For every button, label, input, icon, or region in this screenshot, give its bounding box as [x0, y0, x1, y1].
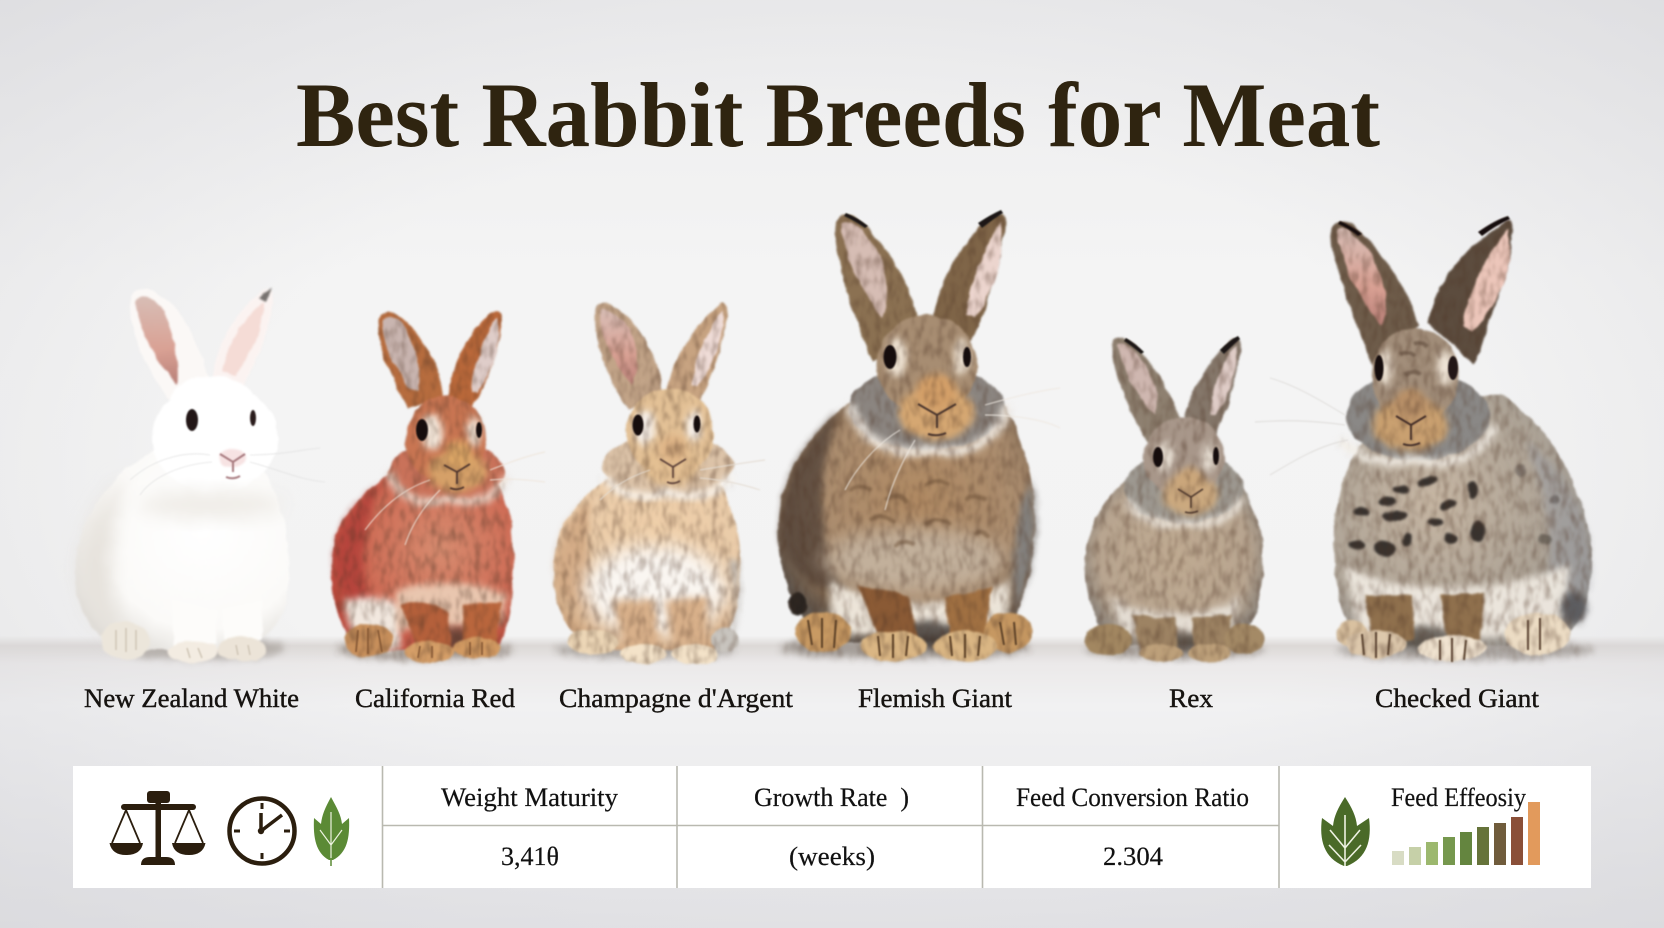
value: ratio: 2.304 — [1103, 842, 1163, 871]
value: weight: 3,41θ — [501, 842, 559, 871]
icon: balance scale — [110, 791, 206, 865]
header: Feed Efficiency: Feed Effeosiy — [1391, 783, 1526, 812]
rabbit: California Red — [332, 311, 545, 663]
rabbit: Rex — [1085, 336, 1265, 662]
title: Best Rabbit Breeds for Meat — [296, 64, 1380, 166]
label: New Zealand White: New Zealand White — [84, 684, 299, 713]
icon: green leaf — [314, 797, 349, 866]
label: California Red: California Red — [355, 684, 515, 713]
header: Weight Maturity: Weight Maturity — [441, 783, 618, 812]
label: Rex: Rex — [1169, 684, 1213, 713]
rabbit: Checked Giant — [1255, 216, 1593, 662]
rabbit: New Zealand White — [75, 288, 325, 663]
value: weeks: (weeks) — [789, 842, 875, 871]
label: Checked Giant: Checked Giant — [1375, 684, 1540, 713]
icon: clock — [230, 798, 294, 864]
icon: dark green leaf — [1321, 797, 1370, 866]
rabbit: Flemish Giant — [778, 210, 1060, 661]
comparison table — [73, 766, 1591, 888]
rabbit: Champagne d'Argent — [553, 302, 765, 664]
header: Growth Rate: Growth Rate ) — [754, 783, 909, 812]
header: Feed Conversion Ratio: Feed Conversion Ratio — [1016, 783, 1249, 812]
label: Champagne d'Argent: Champagne d'Argent — [559, 684, 794, 713]
label: Flemish Giant: Flemish Giant — [858, 684, 1013, 713]
bar chart: feed efficiency — [1392, 802, 1540, 865]
